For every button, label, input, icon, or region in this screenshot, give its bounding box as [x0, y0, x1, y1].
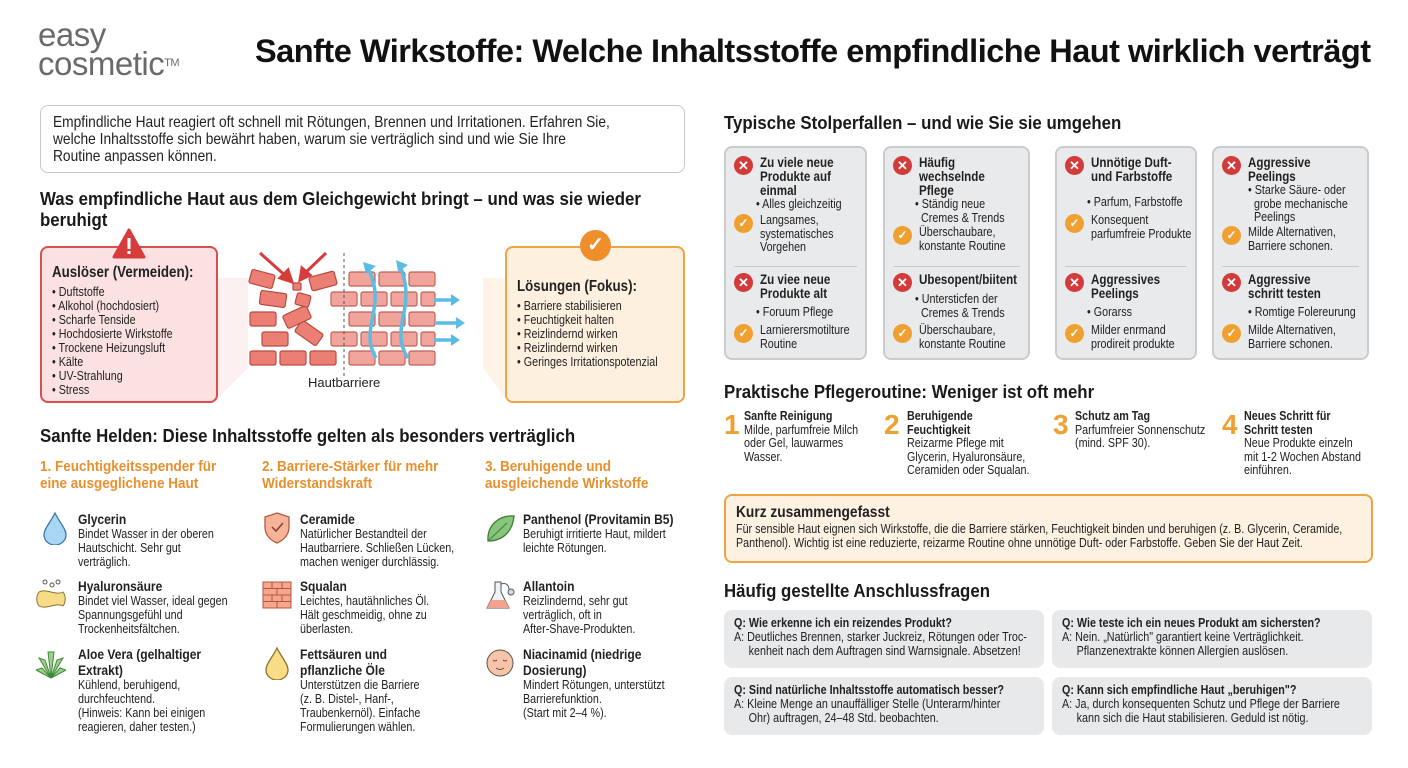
ingredient: Ceramide — [264, 511, 454, 569]
ingredient: Aloe Vera: (Hinweis: Kann bei einigen — [78, 706, 205, 720]
card 1: Zu viee neue Produkte alt — [760, 272, 830, 301]
column heading 3 — [485, 458, 648, 492]
text: 4 — [1222, 409, 1238, 440]
summary box: Für sensible Haut eignen sich Wirkstoffe, die die Barriere stärken, Feuchtigkeit binden und beruhigen (z. B. Glycerin, Ceramide, Panthenol). Wichtig ist eine reduzierte, reizarme Routine ohne unnötige Duft- oder Farbstoffe. Geben Sie der Haut Zeit. — [736, 522, 1342, 550]
text: Reizarme Pflege mit — [907, 436, 1004, 450]
logo — [38, 16, 179, 82]
illustration: skin barrier — [218, 252, 505, 398]
panel: triggers — [40, 246, 218, 403]
card 2 — [883, 146, 1030, 360]
icon: warning — [112, 228, 146, 258]
card 3: ✕ — [1069, 158, 1080, 173]
ingredient: Squalan: Hält geschmeidig, ohne zu — [300, 608, 427, 622]
card 3: ✕ — [1069, 275, 1080, 290]
ingredient: Hyaluronsäure: Hyaluronsäure — [78, 578, 162, 594]
faq 1: Q: Wie erkenne ich ein reizendes Produkt? — [734, 616, 952, 630]
icon: check: ✓ — [587, 234, 604, 256]
card 3: Milder enrmand prodireit produkte — [1091, 323, 1175, 350]
ingredient: Glycerin: Glycerin — [78, 511, 126, 527]
ingredient: Hyaluronsäure — [36, 578, 228, 636]
step 4 — [1222, 409, 1361, 477]
card 4: Milde Alternativen, Barriere schonen. — [1248, 225, 1336, 252]
ingredient: Panthenol: Panthenol (Provitamin B5) — [523, 511, 674, 527]
card 2: Cremes & Trends — [921, 210, 1005, 224]
card 4 — [1212, 146, 1369, 360]
column heading 1 — [40, 458, 216, 492]
panel: solutions: • Barriere stabilisieren — [517, 299, 622, 313]
card 1: Langsames, systematisches Vorgehen — [760, 213, 833, 254]
faq 3: Q: Sind natürliche Inhaltsstoffe automatisch besser? — [734, 683, 1004, 697]
heading: gentle heroes: Sanfte Helden: Diese Inhaltsstoffe gelten als besonders verträglich — [40, 425, 575, 446]
faq 1: A: Deutliches Brennen, starker Juckreiz, Rötungen oder Troc- — [734, 630, 1027, 644]
card 2: Ubesopent/biitent — [919, 272, 1017, 287]
heading: FAQ: Häufig gestellte Anschlussfragen — [724, 580, 990, 601]
ingredient: Allantoin: Reizlindernd, sehr gut — [523, 594, 628, 608]
text: Glycerin, Hyaluronsäure, — [907, 450, 1025, 464]
card 3: Unnötige Duft- und Farbstoffe — [1091, 155, 1172, 184]
text: Neues Schritt für — [1244, 409, 1331, 423]
card 2: wechselnde — [919, 169, 985, 184]
card 1: ✕ — [738, 158, 749, 173]
text: oder Gel, lauwarmes — [744, 436, 843, 450]
text: 1 — [724, 409, 740, 440]
card 1: ✕ — [738, 275, 749, 290]
faq 1 — [724, 610, 1044, 668]
ingredient: Fettsäuren: Formulierungen wählen. — [300, 720, 415, 734]
panel: solutions: • Reizlindernd wirken — [517, 327, 618, 341]
logo: cosmeticTM — [38, 45, 179, 82]
faq 2: A: Nein. „Natürlich" garantiert keine Verträglichkeit. — [1062, 630, 1304, 644]
panel: triggers: • Alkohol (hochdosiert) — [52, 299, 159, 313]
panel: solutions: Lösungen (Fokus): — [517, 278, 637, 295]
text: Neue Produkte einzeln — [1244, 436, 1353, 450]
card 1: • Foruum Pflege — [756, 305, 833, 319]
card 2: Häufig — [919, 155, 955, 170]
column heading 3: ausgleichende Wirkstoffe — [485, 475, 648, 492]
ingredient: Panthenol: leichte Rötungen. — [523, 541, 607, 555]
ingredient: Hyaluronsäure: Bindet viel Wasser, ideal gegen Spannungsgefühl und Trockenheitsfältchen. — [78, 594, 228, 636]
text: Wasser. — [744, 450, 782, 464]
faq 4: kann sich die Haut stabilisieren. Geduld ist nötig. — [1077, 711, 1308, 725]
card 4: Aggressive Peelings — [1248, 155, 1311, 184]
ingredient: Niacinamid: Mindert Rötungen, unterstützt — [523, 678, 665, 692]
summary box — [724, 494, 1373, 563]
ingredient: Niacinamid: Dosierung) — [523, 662, 587, 678]
column heading 2 — [262, 458, 438, 492]
ingredient: Glycerin — [43, 511, 214, 569]
ingredient: Ceramide: Ceramide — [300, 511, 355, 527]
text: mit 1-2 Wochen Abstand — [1244, 450, 1361, 464]
card 1 — [724, 146, 867, 360]
card 4: ✓ — [1226, 326, 1237, 340]
ingredient: Glycerin: Bindet Wasser in der oberen — [78, 527, 214, 541]
label: Hautbarriere: Hautbarriere — [308, 375, 380, 390]
title: Sanfte Wirkstoffe: Welche Inhaltsstoffe empfindliche Haut wirklich verträgt — [255, 33, 1371, 69]
text: Ceramiden oder Squalan. — [907, 463, 1030, 477]
column heading 2: 2. Barriere-Stärker für mehr — [262, 458, 438, 475]
ingredient: Aloe Vera: durchfeuchtend. — [78, 692, 155, 706]
text: verträglich. — [78, 555, 131, 569]
faq 4: A: Ja, durch konsequenten Schutz und Pflege der Barriere — [1062, 697, 1340, 711]
card 4: • Starke Säure- oder — [1248, 183, 1346, 197]
faq 2: Pflanzenextrakte können Allergien auslösen. — [1077, 644, 1288, 658]
ingredient: Squalan: Leichtes, hautähnliches Öl. — [300, 594, 429, 608]
column heading 1: eine ausgeglichene Haut — [40, 475, 198, 492]
panel: triggers: • Kälte — [52, 355, 83, 369]
heading: imbalance: Was empfindliche Haut aus dem Gleichgewicht bringt – und was sie wieder beruhigt — [40, 188, 641, 230]
logo: easy — [38, 16, 106, 53]
summary box: Kurz zusammengefasst — [736, 504, 890, 521]
intro box: Empfindliche Haut reagiert oft schnell mit Rötungen, Brennen und Irritationen. Erfahren Sie, — [53, 114, 610, 131]
text: After-Shave-Produkten. — [523, 622, 635, 636]
ingredient: Squalan — [262, 578, 429, 636]
text: 3 — [1053, 409, 1069, 440]
panel: solutions: • Reizlindernd wirken — [517, 341, 618, 355]
text: (mind. SPF 30). — [1075, 436, 1150, 450]
card 1: • Alles gleichzeitig — [756, 197, 842, 211]
panel: triggers: • UV-Strahlung — [52, 369, 123, 383]
ingredient: Panthenol — [487, 511, 674, 555]
faq 3: Ohr) auftragen, 24–48 Std. beobachten. — [749, 711, 939, 725]
faq 2: Q: Wie teste ich ein neues Produkt am sichersten? — [1062, 616, 1321, 630]
intro box — [40, 105, 685, 173]
text: einführen. — [1244, 463, 1292, 477]
text: Parfumfreier Sonnenschutz — [1075, 422, 1205, 436]
ingredient: Fettsäuren: (z. B. Distel-, Hanf-, — [300, 692, 394, 706]
faq 4 — [1052, 677, 1372, 735]
ingredient: Allantoin: verträglich, oft in — [523, 608, 602, 622]
card 1: ✓ — [738, 326, 749, 340]
card 4: ✓ — [1226, 228, 1237, 242]
faq 4: Q: Kann sich empfindliche Haut „beruhigen"? — [1062, 683, 1296, 697]
text: Schritt testen — [1244, 422, 1313, 436]
ingredient: Niacinamid — [486, 646, 665, 720]
panel: triggers: Auslöser (Vermeiden): — [52, 264, 193, 281]
card 4: Peelings — [1254, 210, 1295, 224]
ingredient: Aloe Vera: reagieren, daher testen.) — [78, 720, 196, 734]
card 2: Cremes & Trends — [921, 306, 1005, 320]
faq 3 — [724, 677, 1044, 735]
ingredient: Niacinamid: Niacinamid (niedrige — [523, 646, 641, 662]
ingredient: Glycerin: Hautschicht. Sehr gut — [78, 541, 181, 555]
text: Milde, parfumfreie Milch — [744, 422, 858, 436]
card 1: ✓ — [738, 216, 749, 230]
ingredient: Panthenol: Beruhigt irritierte Haut, mildert — [523, 527, 666, 541]
ingredient: Aloe Vera: Aloe Vera (gelhaltiger — [78, 646, 201, 662]
card 4: Milde Alternativen, Barriere schonen. — [1248, 323, 1336, 350]
card 1: Zu viele neue Produkte auf einmal — [760, 155, 834, 198]
panel: triggers: • Scharfe Tenside — [52, 313, 136, 327]
panel: solutions: • Geringes Irritationspotenzial — [517, 355, 658, 369]
icon: check — [580, 230, 611, 261]
text: überlasten. — [300, 622, 353, 636]
card 4: ✕ — [1226, 158, 1237, 173]
text: Sanfte Reinigung — [744, 409, 832, 423]
column heading 1: 1. Feuchtigkeitsspender für — [40, 458, 216, 475]
ingredient: Niacinamid: Barrierefunktion. — [523, 692, 602, 706]
panel: triggers: • Duftstoffe — [52, 285, 105, 299]
card 2: Überschaubare, konstante Routine — [919, 323, 1006, 350]
panel: triggers: • Hochdosierte Wirkstoffe — [52, 327, 173, 341]
text: Beruhigende — [907, 409, 973, 423]
step 3 — [1053, 409, 1205, 450]
card 4: • Romtige Folereurung — [1248, 305, 1356, 319]
card 3 — [1055, 146, 1197, 360]
intro box: Routine anpassen können. — [53, 148, 217, 165]
card 2: ✓ — [897, 228, 908, 242]
ingredient: Fettsäuren — [265, 646, 420, 734]
heading: routine: Praktische Pflegeroutine: Weniger ist oft mehr — [724, 381, 1094, 402]
card 2: ✕ — [897, 275, 908, 290]
card 2: Pflege — [919, 183, 954, 198]
panel: solutions — [505, 246, 685, 403]
card 1: Larnierersmotilture Routine — [760, 323, 850, 350]
card 2: ✓ — [897, 326, 908, 340]
card 2: ✕ — [897, 158, 908, 173]
ingredient: Fettsäuren: Unterstützen die Barriere — [300, 678, 419, 692]
ingredient: Fettsäuren: Traubenkernöl). Einfache — [300, 706, 420, 720]
intro box: welche Inhaltsstoffe sich bewährt haben, warum sie verträglich sind und wie Sie Ihre — [53, 131, 566, 148]
faq 2 — [1052, 610, 1372, 668]
card 3: ✓ — [1069, 326, 1080, 340]
ingredient: Aloe Vera — [36, 646, 205, 734]
ingredient: Niacinamid: (Start mit 2–4 %). — [523, 706, 607, 720]
card 3: • Gorarss — [1087, 305, 1132, 319]
text: 2 — [884, 409, 900, 440]
card 2: • Ständig neue — [915, 197, 985, 211]
panel: triggers: • Stress — [52, 383, 89, 397]
ingredient: Allantoin — [486, 578, 635, 636]
ingredient: Aloe Vera: Kühlend, beruhigend, — [78, 678, 180, 692]
column heading 3: 3. Beruhigende und — [485, 458, 611, 475]
ingredient: Fettsäuren: Fettsäuren und — [300, 646, 387, 662]
panel: solutions: • Feuchtigkeit halten — [517, 313, 614, 327]
card 2: • Untersticfen der — [915, 292, 998, 306]
column heading 2: Widerstandskraft — [262, 475, 372, 492]
ingredient: Ceramide: Natürlicher Bestandteil der Hautbarriere. Schließen Lücken, machen weniger durchlässig. — [300, 527, 454, 569]
ingredient: Fettsäuren: pflanzliche Öle — [300, 662, 385, 678]
card 4: ✕ — [1226, 275, 1237, 290]
card 3: • Parfum, Farbstoffe — [1087, 195, 1183, 209]
text: Schutz am Tag — [1075, 409, 1150, 423]
faq 3: A: Kleine Menge an unauffälliger Stelle (Unterarm/hinter — [734, 697, 1000, 711]
ingredient: Squalan: Squalan — [300, 578, 347, 594]
ingredient: Allantoin: Allantoin — [523, 578, 575, 594]
step 1 — [724, 409, 858, 464]
card 3: ✓ — [1069, 216, 1080, 230]
card 4: Aggressive schritt testen — [1248, 272, 1321, 301]
text: Feuchtigkeit — [907, 422, 970, 436]
faq 1: kenheit nach dem Auftragen sind Warnsignale. Absetzen! — [749, 644, 1021, 658]
card 4: grobe mechanische — [1254, 196, 1348, 210]
step 2 — [884, 409, 1030, 477]
panel: triggers: • Trockene Heizungsluft — [52, 341, 165, 355]
heading: pitfalls: Typische Stolperfallen – und wie Sie sie umgehen — [724, 112, 1121, 133]
card 3: Aggressives Peelings — [1091, 272, 1160, 301]
card 3: Konsequent parfumfreie Produkte — [1091, 213, 1191, 240]
card 2: Überschaubare, konstante Routine — [919, 225, 1006, 252]
ingredient: Aloe Vera: Extrakt) — [78, 662, 123, 678]
